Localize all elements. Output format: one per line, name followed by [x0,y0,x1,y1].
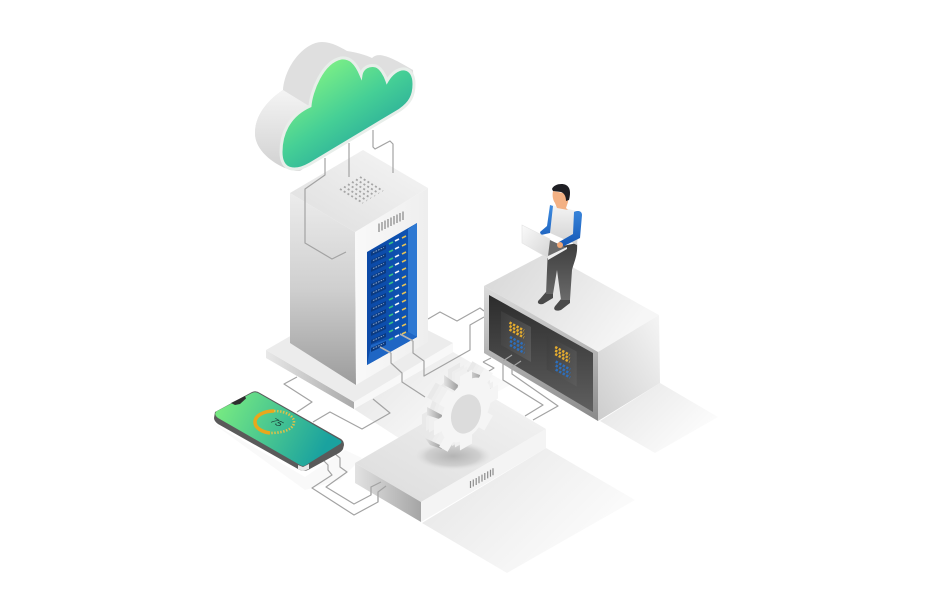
floor shadow: platform [422,448,635,573]
top vent dots [340,177,383,203]
battery ring [255,411,294,433]
phone edge highlight [298,464,309,471]
tower and rack wires [305,130,484,397]
cloud left lobe [255,90,309,168]
laptop base [548,240,567,256]
tower plinth [266,296,453,409]
platform top [355,390,546,502]
storage box [484,253,660,421]
shoes [538,292,570,311]
floor shadow: box [600,383,718,453]
cloud [255,42,414,171]
arms [540,205,582,247]
module 2 [547,336,577,386]
phone screen [215,392,342,466]
box top [484,253,659,352]
platform wire stubs [371,482,386,502]
tower left face [290,193,356,385]
hand [557,242,563,248]
person with laptop [522,184,582,311]
cloud extrusion [255,42,414,171]
phone notch [231,396,246,405]
dark panel [489,295,593,412]
head [553,191,568,210]
legs [546,243,577,300]
side vent [379,212,403,232]
server tower [266,150,453,409]
platform left face [355,463,421,522]
box right face [598,315,660,421]
floor shadow: tower [354,352,510,442]
torso [550,205,580,245]
connection wires [284,308,558,515]
platform [355,390,546,522]
battery value: 75 [267,417,286,428]
phone body [214,391,344,471]
blue server rack [367,223,417,365]
laptop [522,225,550,258]
platform vent [470,468,493,488]
phone [214,391,344,471]
gear shadow [415,442,491,470]
box front frame [484,286,598,421]
cloud face [281,58,414,169]
hair [552,184,570,201]
panel wire stubs [503,355,521,367]
gear tooth sides [425,370,497,449]
floor shadow: phone [211,422,362,490]
gear hole [446,391,486,437]
platform right face [421,429,546,522]
tower top [290,150,428,232]
gear [422,348,498,466]
tower right face [355,188,428,385]
module 1 [501,311,531,362]
